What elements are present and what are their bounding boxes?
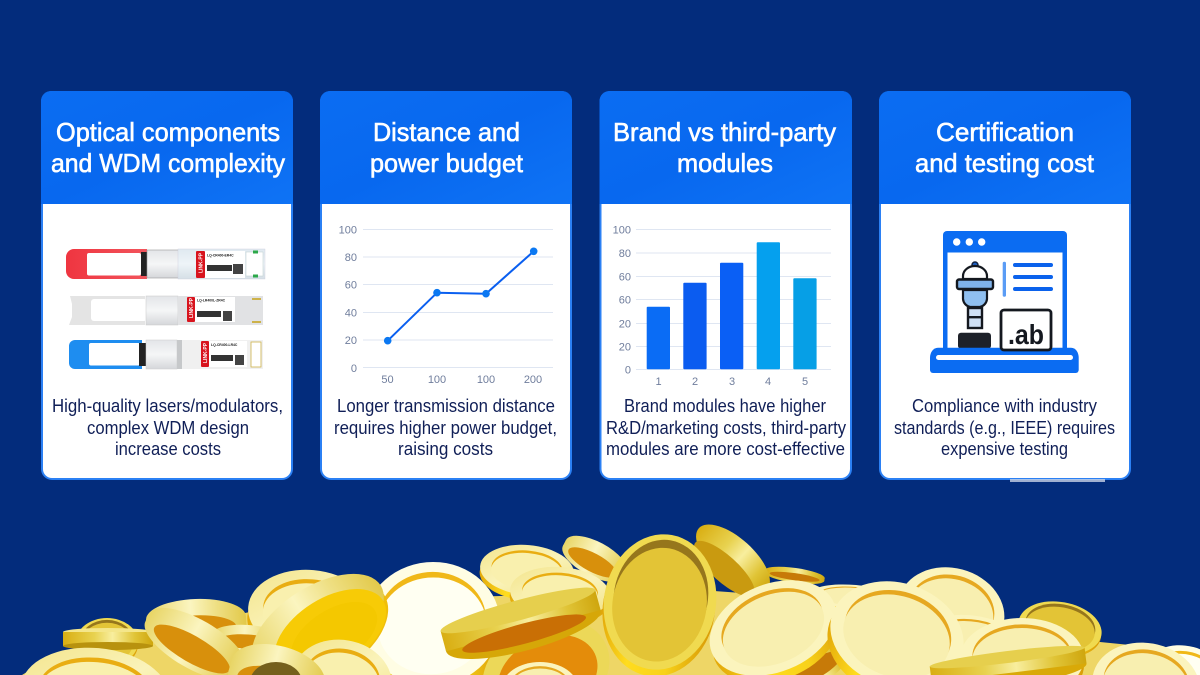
text: certification description: expensive testing xyxy=(941,439,1068,459)
panel: brand vs third-party modules xyxy=(600,91,852,479)
heading: optical components xyxy=(41,91,293,204)
line chart: 80 xyxy=(345,252,357,264)
image: white transceiver module: LQ-LR400L-ZR4C xyxy=(197,298,226,302)
bar chart: 4 xyxy=(765,376,771,388)
text: certification description: standards (e.g., IEEE) requires xyxy=(894,418,1115,438)
bar chart: 60 xyxy=(619,294,631,306)
heading: certification and testing: Certification xyxy=(936,117,1074,147)
panel: certification and testing cost xyxy=(879,91,1131,479)
image: white transceiver module xyxy=(69,296,263,325)
line chart: 100 xyxy=(339,224,357,236)
line chart: 40 xyxy=(345,308,357,320)
bar chart: 0 xyxy=(625,364,631,376)
text: optical description: complex WDM design xyxy=(87,418,249,438)
bar chart: 2 xyxy=(692,376,698,388)
text: distance description: requires higher power budget, xyxy=(334,418,557,438)
bar chart: 5 xyxy=(802,376,808,388)
text: distance description: Longer transmission distance xyxy=(337,396,555,416)
line chart xyxy=(339,224,553,386)
heading: optical components: and WDM complexity xyxy=(51,148,285,178)
panel: optical components and WDM complexity xyxy=(41,91,293,479)
bar chart: 20 xyxy=(619,318,631,330)
text: certification description: Compliance with industry xyxy=(912,396,1097,416)
image: red transceiver module xyxy=(66,249,265,279)
image: blue transceiver module: LINK-PP xyxy=(203,342,209,363)
heading: certification and testing xyxy=(879,91,1131,204)
line chart: 200 xyxy=(524,374,542,386)
bar chart: 3 xyxy=(729,376,735,388)
line chart: 60 xyxy=(345,280,357,292)
heading: distance and power budget xyxy=(320,91,572,204)
heading: optical components: Optical components xyxy=(56,117,280,147)
icon: lab testing window xyxy=(930,231,1079,373)
bar chart: 20 xyxy=(619,342,631,354)
heading: brand vs third-party xyxy=(600,91,852,204)
image: white transceiver module: LINK-PP xyxy=(189,297,195,318)
bar chart: 1 xyxy=(655,376,662,388)
line chart: 50 xyxy=(381,374,394,386)
text: distance description xyxy=(334,396,557,459)
text: brand description: modules are more cost-effective xyxy=(606,439,845,459)
illustration: pile of gold coins xyxy=(17,513,1200,675)
image: red transceiver module: LINK-PP xyxy=(198,252,204,273)
line chart: 0 xyxy=(351,363,357,375)
text: optical description: increase costs xyxy=(115,439,221,459)
text: optical description: High-quality lasers/modulators, xyxy=(52,396,283,416)
heading: brand vs third-party: Brand vs third-party xyxy=(613,117,836,147)
text: brand description xyxy=(606,396,846,459)
line chart: 100 xyxy=(428,374,446,386)
text: certification description xyxy=(894,396,1115,459)
image: blue transceiver module: LQ-CR400-LR4C xyxy=(211,343,238,347)
bar chart: 100 xyxy=(613,224,631,236)
text: optical description xyxy=(52,396,283,459)
icon: lab testing window: .ab xyxy=(1008,319,1044,350)
line chart: 100 xyxy=(477,374,495,386)
bar chart xyxy=(613,224,831,388)
heading: brand vs third-party: modules xyxy=(677,148,773,178)
line chart: 20 xyxy=(345,335,357,347)
bar chart: 80 xyxy=(619,248,631,260)
image: blue transceiver module xyxy=(69,340,263,369)
text: distance description: raising costs xyxy=(398,439,493,459)
heading: distance and power budget: power budget xyxy=(370,148,524,178)
panel: distance and power budget xyxy=(320,91,572,479)
bar chart: 60 xyxy=(619,272,631,284)
text: brand description: R&D/marketing costs, third-party xyxy=(606,418,846,438)
heading: certification and testing: and testing cost xyxy=(915,148,1095,178)
image: red transceiver module: LQ-CR400-ER4C xyxy=(207,254,234,258)
heading: distance and power budget: Distance and xyxy=(373,117,520,147)
text: brand description: Brand modules have higher xyxy=(624,396,826,416)
